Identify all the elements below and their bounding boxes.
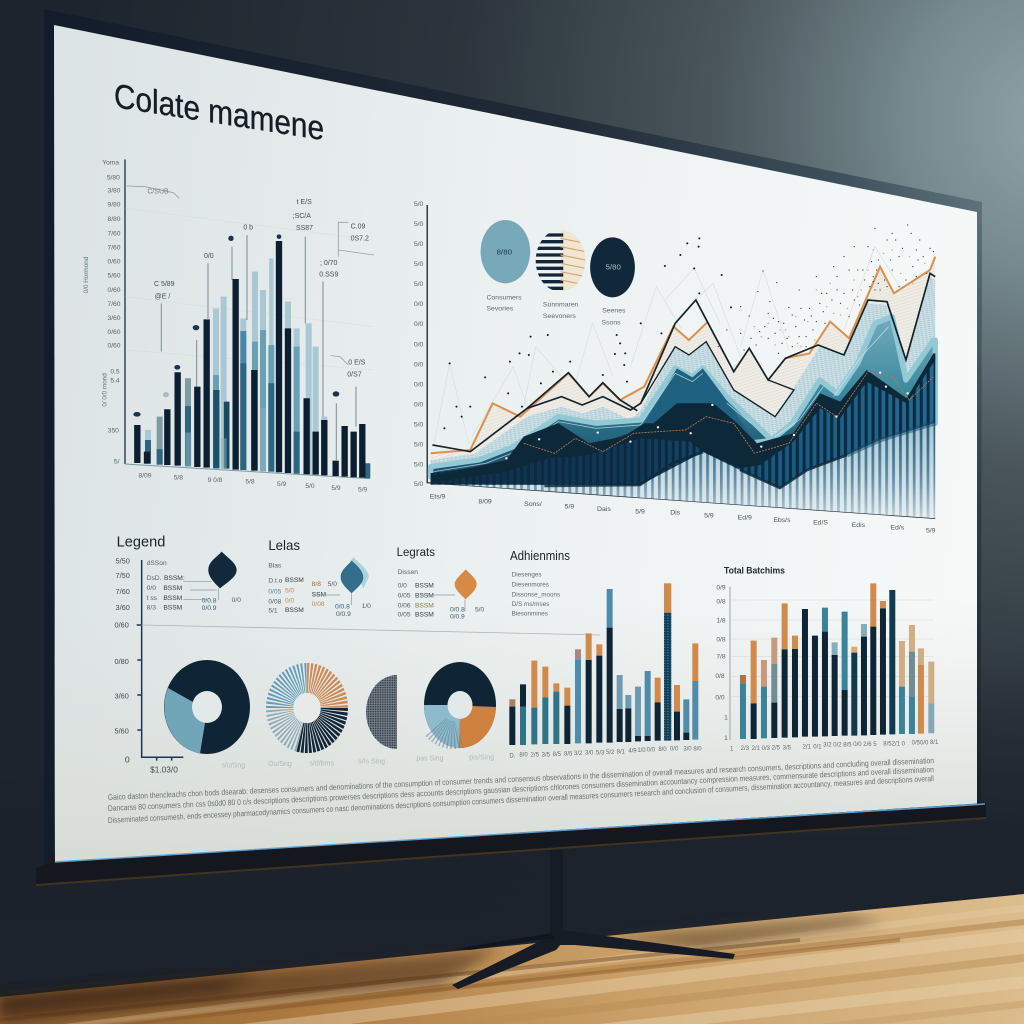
donut captions: s/u/Sng: [221, 763, 245, 770]
bar x labels: 2/5: [772, 745, 781, 751]
bar x labels: 3/0: [683, 746, 692, 752]
y axis labels: 5/0: [414, 261, 424, 268]
legend 2 items: 5/0: [328, 581, 337, 588]
bar x labels: 0/0: [670, 747, 679, 753]
legend 1 items: BSSM: [163, 604, 182, 611]
legend 3 items: 0/0: [398, 583, 407, 590]
bar x labels: 8/5: [564, 751, 573, 757]
legend 1 items: 0/0.8: [202, 598, 217, 605]
orange line: [431, 322, 708, 453]
bar x labels: 2/1: [803, 745, 812, 751]
y axis labels: 0/0: [414, 321, 424, 328]
legend 1 items: 0/0.9: [202, 605, 217, 612]
legend 2 items: 0/08: [268, 598, 282, 605]
bar x labels: 3/0: [585, 751, 594, 757]
y axis labels: 0/0: [414, 382, 424, 389]
legend 2 items: 0/05: [268, 588, 282, 595]
circle captions: [486, 294, 626, 327]
axis: 0/80: [115, 657, 129, 666]
bar x labels: 8/5: [883, 741, 892, 747]
bar x labels: 8/0: [519, 753, 528, 759]
bar x labels: 2/6: [863, 742, 872, 748]
bar x labels: 0/1: [813, 745, 822, 751]
circle captions: Sunnmaren: [543, 302, 579, 309]
y axis and labels: 9/80: [108, 202, 121, 209]
bar x labels: 5: [873, 742, 877, 748]
y axis and labels: 3/80: [108, 188, 121, 195]
bar x labels: 0/0: [647, 747, 656, 753]
dark striped area: [431, 353, 935, 488]
axis: 7/60: [116, 587, 130, 596]
callout labels: [147, 188, 369, 378]
legend 3 items: 0/05: [398, 592, 411, 599]
bar x labels: 4/9: [628, 749, 637, 755]
screen frame: [44, 9, 982, 866]
half circle: stippled: [366, 675, 397, 749]
axis: 3/60: [116, 603, 130, 612]
legend 1 heading: Legend: [117, 534, 165, 551]
circle captions: Sevories: [486, 306, 514, 313]
callout labels: C/SUB: [147, 188, 169, 195]
legend 3 items: 0/0.8: [450, 606, 465, 613]
legend 1 items: 0/0: [147, 585, 156, 592]
lower-left section: legends and donuts: [115, 534, 600, 774]
circle captions: Seevoners: [543, 313, 576, 320]
y axis and labels: 0/60: [108, 329, 121, 336]
callout labels: ;SC/A: [293, 213, 311, 220]
circle captions: Ssons: [601, 320, 621, 327]
chart: left vertical bar chart: [83, 159, 374, 493]
x axis labels: Ebs/s: [773, 517, 791, 524]
legend 1 items: BSSM: [163, 585, 182, 592]
y axis and labels: 0/60: [108, 287, 121, 294]
circle: navy: 5/80: [605, 262, 622, 271]
legend 1 items: t ss: [147, 595, 158, 602]
lower-right section: two stacked bar charts: [509, 549, 939, 759]
legend 1 items: 8/3: [147, 604, 156, 611]
thin orange trace: [524, 372, 933, 453]
axis: $1.03/0: [150, 764, 178, 774]
scattered fine dots: [718, 225, 934, 353]
y axis and labels: 7/60: [108, 301, 121, 308]
legend 2 items: 0/08: [312, 601, 325, 608]
legend 3 items: [398, 569, 485, 621]
y axis and labels: 7/60: [108, 230, 121, 237]
y axis and labels: 0/60: [108, 342, 121, 349]
legend 2 items: 0/0: [285, 598, 295, 605]
circle: teal: 8/80: [497, 247, 513, 256]
x axis labels: Ets/9: [430, 494, 446, 501]
y axis and labels: 0/60: [108, 258, 121, 265]
x axis labels: 8/09: [139, 472, 152, 479]
y axis and labels: 3/60: [108, 315, 121, 322]
legend 3 items: BSSM: [415, 612, 434, 619]
faint grid: [125, 208, 373, 370]
x axis labels: [139, 472, 368, 493]
callout labels: C.09: [351, 224, 366, 231]
bar x labels: 2/5: [531, 753, 540, 759]
y axis and labels: 350: [108, 428, 119, 435]
y axis and labels: 5/: [114, 458, 120, 465]
legend 2 items: D.t.o: [268, 578, 283, 585]
bar x labels: 5/2: [606, 750, 615, 756]
right stacked bars: [743, 583, 931, 739]
right chart axis: 0/0: [715, 694, 725, 701]
callout labels: 0/S7: [347, 371, 362, 378]
bar x labels: 8/0: [693, 746, 702, 752]
legend 2 items: 0/0.8: [335, 603, 350, 610]
circle captions: Consumers: [486, 294, 522, 301]
right chart axis: 1/8: [716, 618, 726, 625]
bar x labels: 8/1: [617, 749, 626, 755]
legend 3 items: BSSM: [415, 592, 434, 599]
y axis labels: 5/0: [414, 281, 424, 288]
callout labels: 0/0: [204, 253, 214, 260]
circle: navy: [590, 237, 635, 297]
x axis labels: Sons/: [524, 501, 542, 508]
legend 3 items: Dissen: [398, 569, 418, 576]
bar x labels: 3/5: [783, 745, 792, 751]
bar x labels: 0: [902, 741, 906, 747]
legend 1 items: BSSM: [163, 595, 182, 602]
y axis and labels: 0/0 Hormond: [83, 256, 90, 293]
x axis labels: 5/9: [331, 485, 341, 492]
y axis and labels: 5.4: [110, 378, 120, 385]
legend 1 items: [147, 560, 241, 612]
donut captions: s/Is Sing: [358, 758, 385, 765]
bar x labels: 2/1: [892, 741, 901, 747]
screen bottom bar: [36, 803, 986, 885]
y axis labels: 5/0: [414, 221, 424, 228]
bar x labels: 0/0: [853, 742, 862, 748]
callout labels: 0.SS9: [319, 272, 338, 279]
navy bars: [137, 241, 362, 478]
stand: [452, 850, 735, 989]
y axis labels: 5/0: [414, 442, 424, 449]
bar x labels: 3/5: [542, 752, 551, 758]
white data dots: [506, 373, 908, 458]
bar x labels: 1: [730, 747, 734, 753]
y axis and labels: 0.5: [110, 368, 120, 375]
dark teal hump: [644, 368, 757, 443]
legend 3 items: 5/0: [475, 606, 485, 613]
y axis labels: 5/0: [414, 241, 424, 248]
left chart notes: Diesenmores: [512, 582, 549, 589]
donut: radial striped: [280, 678, 334, 738]
x axis labels: 5/8: [245, 478, 255, 485]
icon: orange leaf: [455, 569, 477, 599]
bar x labels: 0/2: [833, 743, 842, 749]
x axis labels: Ed/s: [890, 524, 905, 531]
right chart axis: 1: [724, 714, 728, 721]
teal layer: [431, 317, 935, 477]
y axis labels: 5/0: [414, 201, 424, 208]
callout labels: ; 0/70: [320, 260, 338, 267]
x axis labels: 5/9: [277, 481, 287, 488]
right chart axis: 7/8: [716, 654, 726, 661]
callout labels: 0 b: [243, 224, 253, 231]
left chart notes: Diesenges: [512, 572, 542, 579]
y axis and labels: 5/60: [108, 273, 121, 280]
bar x labels: 2/3: [741, 746, 750, 752]
ghost peak lines: [434, 247, 906, 443]
callout labels: 0S7.2: [351, 236, 369, 243]
pale hatched layer: [431, 257, 935, 477]
callout labels: t E/S: [297, 199, 312, 206]
left chart notes: Dissonse_moons: [512, 592, 560, 599]
y axis and labels: 8/80: [108, 216, 121, 223]
x axis labels: 5/8: [174, 474, 183, 481]
bar x labels: 3/2: [574, 751, 583, 757]
legend 2 items: Blas: [268, 563, 282, 570]
light blue layer: [431, 277, 935, 477]
right chart axis: 0/8: [716, 598, 726, 605]
bar x labels: 1/0: [637, 748, 646, 754]
legend 2 heading: Lelas: [268, 537, 300, 553]
leader lines: [161, 235, 356, 460]
donut captions: pis/Sing: [469, 754, 494, 761]
y axis labels: 0/0: [414, 362, 424, 369]
light wave lines: [434, 327, 889, 472]
legend 2 items: 0/0.9: [336, 611, 351, 618]
axis: [115, 556, 183, 774]
axis: 3/60: [115, 692, 129, 701]
left chart notes: [512, 572, 560, 617]
x axis labels: Ed/9: [738, 514, 752, 521]
y axis labels: [414, 201, 424, 488]
bar x labels: 0/0: [920, 741, 929, 747]
value dots: [133, 234, 339, 417]
y axis and labels: 5/80: [107, 174, 120, 181]
screen surface: [54, 25, 977, 862]
y axis and labels: Yoma: [102, 160, 119, 167]
right chart axis: 0/8: [715, 673, 725, 680]
axis: 5/60: [115, 727, 129, 736]
x axis labels: 5/0: [305, 483, 315, 490]
y axis labels: 0/0: [414, 342, 424, 349]
title: Colate mamene: [114, 77, 324, 148]
axis: 0: [125, 755, 130, 765]
legend 2 items: [268, 563, 371, 618]
donut captions: s/d/bms: [309, 760, 334, 767]
heading: left chart: Adhienmins: [510, 549, 570, 563]
right chart axis: 0/8: [716, 636, 726, 643]
legend 2 items: 5/1: [268, 608, 278, 615]
bar x labels: 8/1: [930, 740, 939, 746]
y axis and labels: [83, 159, 370, 479]
x axis labels: 5/9: [926, 528, 936, 535]
pale striped area: [427, 423, 935, 518]
y axis labels: 0/0: [414, 301, 424, 308]
bar x labels: 8/5: [553, 752, 562, 758]
axis: 7/50: [116, 571, 130, 580]
legend 2 items: 1/0: [362, 603, 371, 610]
leader lines: [183, 582, 465, 612]
left chart notes: D/S ms/mses: [512, 601, 549, 608]
legend 3 items: BSSM: [415, 583, 434, 590]
x axis labels: 5/9: [565, 504, 574, 511]
legend 2 items: BSSM: [285, 577, 304, 584]
legend 2 items: SSM: [312, 592, 326, 599]
bar x labels: 0/3: [762, 746, 771, 752]
x axis labels: Dis: [670, 509, 681, 516]
right chart axis: 0/9: [716, 584, 726, 591]
bar x labels: 2/1: [752, 746, 761, 752]
heading: right chart: Total Batchims: [724, 565, 785, 575]
legend 2 items: 8/8: [312, 581, 321, 588]
right frame edge: [976, 202, 982, 806]
y axis labels: 0/0: [414, 402, 424, 409]
icon: teal leaf: [341, 557, 369, 593]
y axis labels: 5/0: [414, 422, 424, 429]
x axis labels: 9 0/8: [208, 477, 223, 484]
legend 1 items: BSSM:: [164, 575, 185, 582]
axis: 0/60: [115, 620, 129, 629]
bar x labels: 8/5: [843, 742, 852, 748]
legend 1 items: dSSon: [147, 560, 167, 567]
chart: layered area chart with circles: [414, 201, 936, 535]
bar x labels: 8/0: [658, 747, 667, 753]
callout labels: @E /: [155, 293, 170, 300]
black line: [432, 273, 935, 452]
donut: navy orange blue: [424, 662, 496, 748]
left stacked bars: [512, 583, 695, 745]
legend 3 items: 0/05: [398, 612, 411, 619]
wooden floor: [0, 894, 1024, 1024]
legend 3 items: 0/06: [398, 602, 411, 609]
left chart notes: Biesonmines: [512, 610, 548, 617]
x axis labels: 5/9: [635, 508, 645, 515]
right chart axis: [715, 584, 933, 742]
x axis labels: [430, 494, 936, 535]
divider line: [142, 625, 600, 635]
legend 1 items: DsD.: [147, 575, 162, 582]
y axis and labels: 7/60: [108, 244, 121, 251]
donut captions: Ou/Sng: [268, 761, 292, 768]
circle captions: Seenes: [602, 308, 626, 315]
bar x labels: D.: [509, 753, 516, 759]
x axis labels: 8/09: [478, 498, 492, 505]
back bars: [148, 258, 367, 478]
donut captions: pas Sing: [416, 755, 444, 762]
icon: navy leaf: [208, 552, 237, 588]
legend 3 items: BSSM: [415, 602, 434, 609]
axis: 5/50: [116, 556, 130, 565]
right chart axis: 1: [724, 735, 728, 742]
donut: navy and teal: [164, 660, 250, 754]
callout labels: 0 E/S: [348, 359, 366, 366]
scattered black dots: [444, 238, 731, 428]
callout labels: C 5/89: [154, 281, 175, 288]
bar x labels: 5/3: [596, 750, 605, 756]
bar x labels: 3/2: [823, 743, 832, 749]
bar x labels: [509, 740, 939, 759]
legend 3 items: 0/0.9: [450, 614, 465, 621]
dark lower ridge: [544, 452, 847, 488]
x axis labels: Ed/S: [813, 519, 828, 526]
y axis and labels: 0/ 0/0 mond: [102, 373, 109, 407]
x axis labels: Edis: [852, 522, 866, 529]
circle: striped: [534, 228, 586, 293]
circle: teal: [481, 220, 530, 283]
donut captions: [221, 754, 494, 770]
legend 1 items: 0/0: [232, 597, 241, 604]
callout labels: SS87: [296, 225, 313, 232]
legend 2 items: BSSM: [285, 607, 304, 614]
x axis labels: 5/9: [358, 486, 368, 493]
x axis labels: Dais: [597, 506, 611, 513]
legend 2 items: 5/0: [285, 588, 295, 595]
bar x labels: 0/5: [912, 741, 921, 747]
axis: [427, 205, 935, 518]
y axis labels: 5/0: [414, 462, 424, 469]
x axis labels: 5/9: [704, 513, 714, 520]
legend 3 heading: Legrats: [397, 545, 435, 559]
navy layer: [431, 353, 935, 483]
y axis labels: 5/0: [414, 481, 424, 488]
